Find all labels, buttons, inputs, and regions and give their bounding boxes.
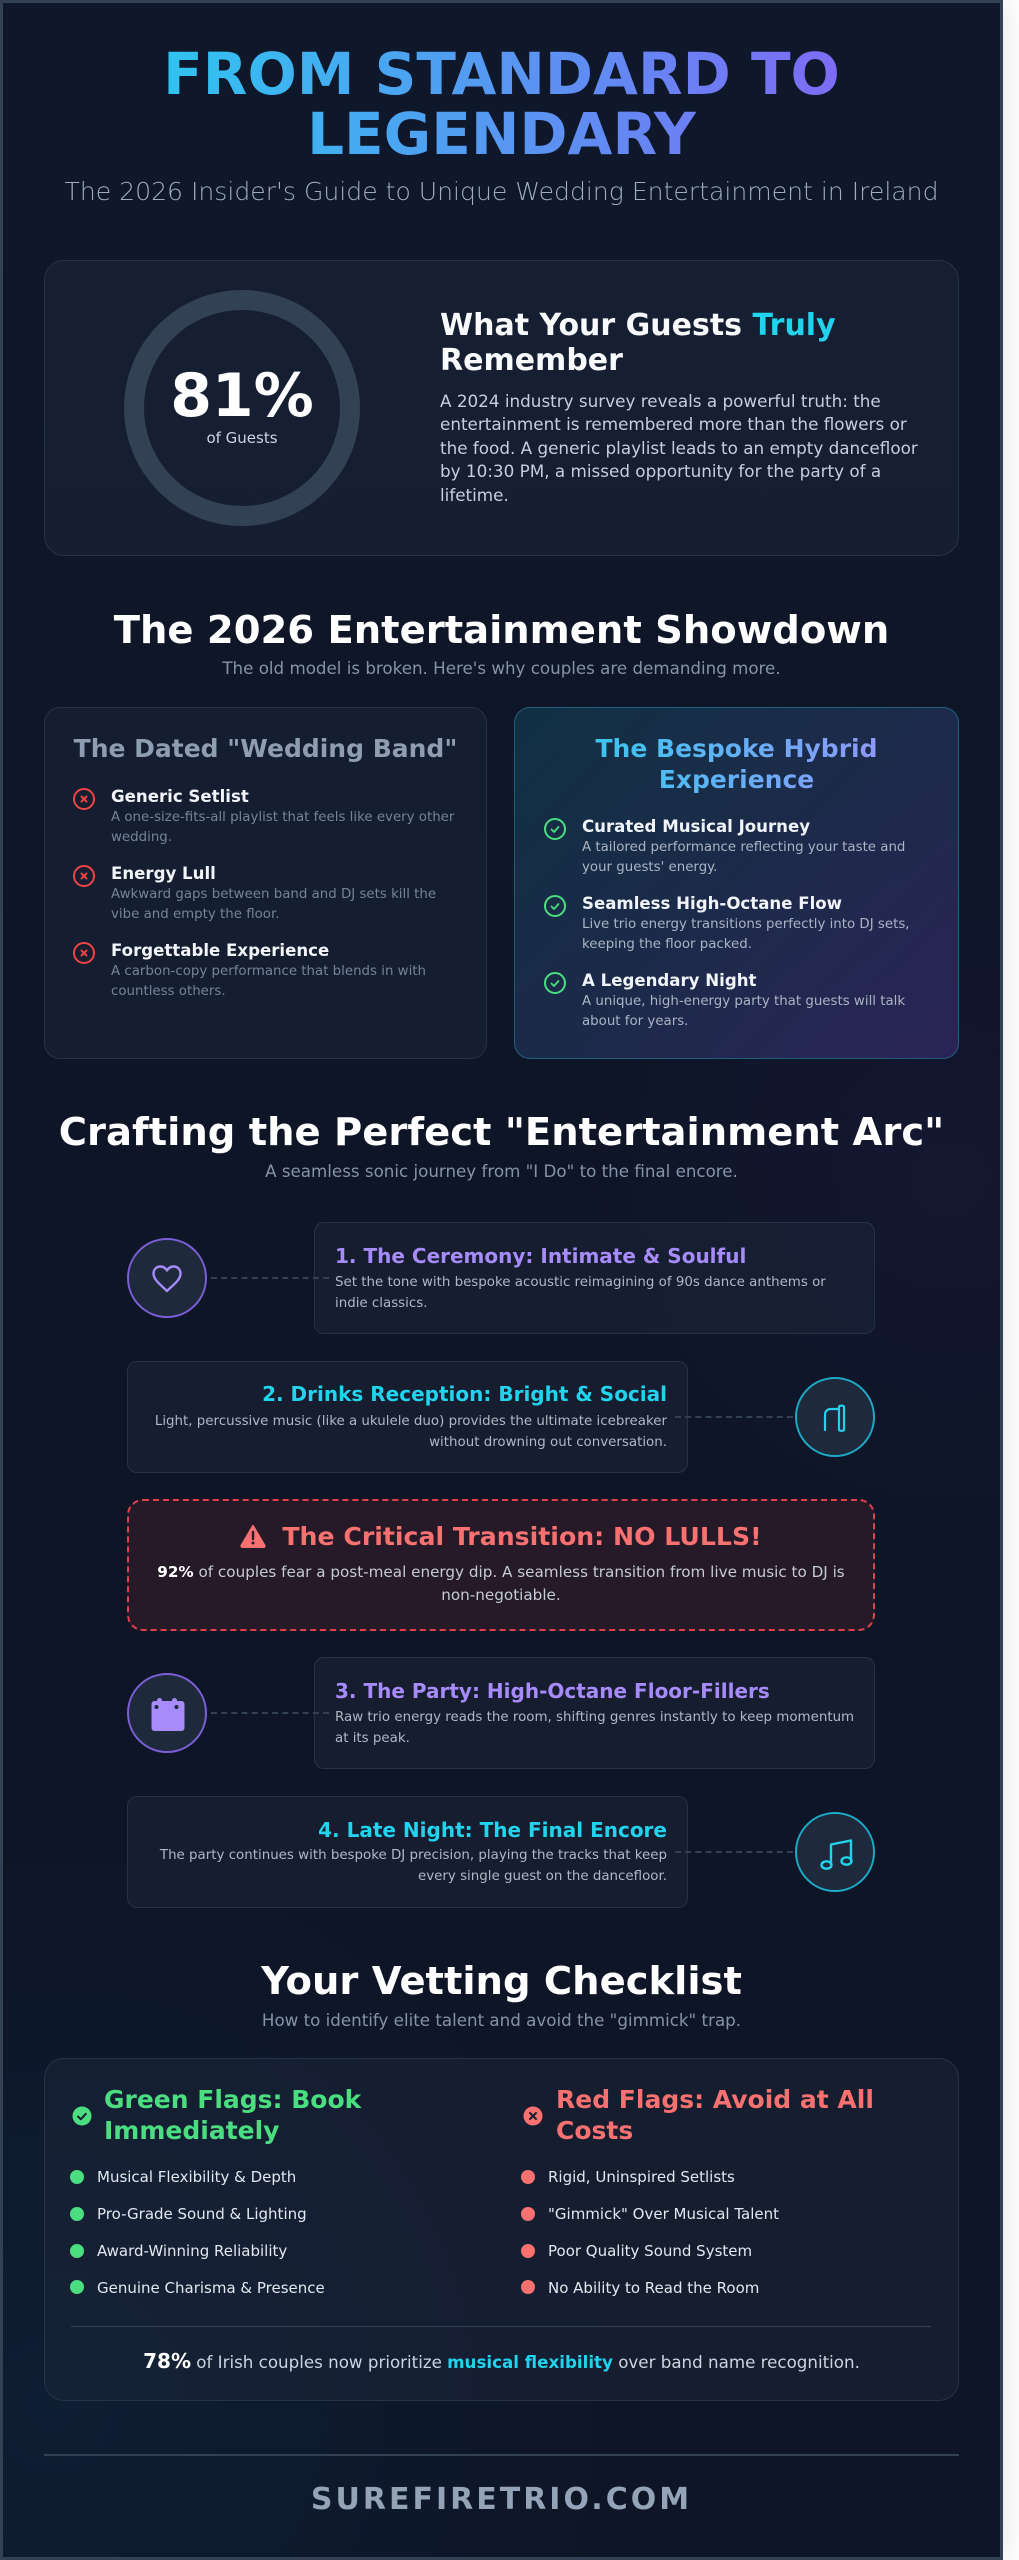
item text — [111, 787, 454, 845]
title — [44, 44, 959, 164]
step text: Light, percussive music (like a ukulele duo) provides the ultimate icebreaker — [155, 1414, 667, 1429]
stat line: 78% of Irish couples now prioritize musical flexibility over band name recognition. — [143, 2349, 860, 2373]
body text: entertainment is remembered more than the flowers or — [440, 414, 907, 434]
item text: A Legendary Night — [582, 971, 756, 990]
icon: check — [544, 972, 566, 994]
flag list — [521, 2168, 779, 2297]
panel: dated wedding band — [44, 707, 487, 1059]
item text — [582, 817, 905, 875]
step text: Set the tone with bespoke acoustic reimagining of 90s dance anthems or — [335, 1275, 826, 1290]
icon: red cross — [524, 2106, 542, 2126]
step text — [335, 1710, 854, 1746]
flag list: Award-Winning Reliability — [97, 2242, 287, 2260]
panel heading: The Bespoke Hybrid — [596, 734, 878, 763]
column: green flags — [70, 2085, 362, 2297]
subheading: entertainment arc: A seamless sonic journey from "I Do" to the final encore. — [265, 1161, 738, 1181]
title: FROM STANDARD TO — [163, 40, 840, 108]
step 4 card — [127, 1796, 688, 1908]
icon: cross — [73, 865, 95, 887]
panel heading: Experience — [659, 765, 814, 794]
panel: checklist — [44, 2058, 959, 2401]
step text: without drowning out conversation. — [429, 1434, 667, 1450]
icon: check — [544, 895, 566, 917]
column: red flags — [521, 2085, 874, 2297]
step title: 4. Late Night: The Final Encore — [318, 1818, 667, 1842]
column heading — [104, 2085, 362, 2145]
item text: countless others. — [111, 984, 226, 999]
body text: by 10:30 PM, a missed opportunity for the party of a — [440, 461, 881, 481]
step text: The party continues with bespoke DJ precision, playing the tracks that keep — [160, 1848, 667, 1863]
step 1 connector — [211, 1277, 329, 1279]
icon: heart — [127, 1238, 207, 1318]
item text — [111, 941, 426, 999]
item text: keeping the floor packed. — [582, 937, 752, 952]
column heading: Immediately — [104, 2116, 279, 2145]
step 4 connector — [675, 1851, 793, 1853]
item text: Awkward gaps between band and DJ sets kill the — [111, 887, 436, 902]
callout text: non-negotiable. — [441, 1586, 561, 1604]
body text: lifetime. — [440, 485, 509, 505]
flag list: Genuine Charisma & Presence — [97, 2279, 325, 2297]
flag list: Musical Flexibility & Depth — [97, 2168, 296, 2186]
title: LEGENDARY — [307, 100, 696, 168]
item text: A carbon-copy performance that blends in with — [111, 964, 426, 979]
item text: Curated Musical Journey — [582, 817, 810, 836]
heading: vetting checklist: Your Vetting Checklist — [261, 1959, 742, 2004]
flag list: "Gimmick" Over Musical Talent — [548, 2205, 779, 2223]
step 3 card — [314, 1657, 875, 1769]
item text: A tailored performance reflecting your taste and — [582, 840, 905, 855]
heading: showdown: The 2026 Entertainment Showdown — [114, 608, 889, 653]
stat label: of Guests — [206, 429, 278, 447]
body text: the food. A generic playlist leads to an empty dancefloor — [440, 438, 918, 458]
icon: green check — [72, 2106, 92, 2126]
step 1 card — [314, 1222, 875, 1334]
icon: music stems — [795, 1377, 875, 1457]
step text — [155, 1414, 667, 1450]
flag list: Rigid, Uninspired Setlists — [548, 2168, 735, 2186]
step 3 connector — [211, 1712, 329, 1714]
heading: what guests remember — [440, 308, 836, 378]
item: forgettable experience — [73, 941, 426, 999]
flag list: Poor Quality Sound System — [548, 2242, 752, 2260]
callout text: 92% of couples fear a post-meal energy dip. A seamless transition from live music to DJ is — [157, 1563, 845, 1581]
icon: music note — [795, 1812, 875, 1892]
item text: your guests' energy. — [582, 860, 717, 875]
item text: A unique, high-energy party that guests will talk — [582, 994, 905, 1009]
panel: bespoke hybrid experience — [514, 707, 959, 1059]
subheading: vetting checklist: How to identify elite talent and avoid the "gimmick" trap. — [262, 2010, 741, 2030]
callout: critical transition — [127, 1499, 875, 1631]
step title: 1. The Ceremony: Intimate & Soulful — [335, 1244, 746, 1268]
item text: A one-size-fits-all playlist that feels like every other — [111, 810, 454, 825]
item: seamless flow — [544, 894, 910, 952]
item text: Seamless High-Octane Flow — [582, 894, 842, 913]
item text: Forgettable Experience — [111, 941, 329, 960]
icon: cross — [73, 788, 95, 810]
item text: vibe and empty the floor. — [111, 907, 280, 922]
item text — [582, 894, 910, 952]
step 2 card — [127, 1361, 688, 1473]
heading: entertainment arc: Crafting the Perfect "Entertainment Arc" — [59, 1110, 944, 1155]
heading: what guests remember: Remember — [440, 342, 623, 378]
step 2 connector — [675, 1416, 793, 1418]
flag list: No Ability to Read the Room — [548, 2279, 759, 2297]
step text: every single guest on the dancefloor. — [418, 1868, 667, 1884]
subheading: showdown: The old model is broken. Here's why couples are demanding more. — [222, 658, 781, 678]
item: generic setlist — [73, 787, 454, 845]
column heading — [556, 2085, 874, 2145]
step text: indie classics. — [335, 1296, 427, 1310]
panel heading — [514, 734, 959, 795]
icon: calendar — [127, 1673, 207, 1753]
item text — [111, 864, 436, 922]
item text: Energy Lull — [111, 864, 216, 883]
column heading: Green Flags: Book — [104, 2085, 361, 2114]
item: legendary night — [544, 971, 905, 1029]
item text: wedding. — [111, 830, 172, 845]
step title: 3. The Party: High-Octane Floor-Fillers — [335, 1679, 770, 1703]
item text: Live trio energy transitions perfectly into DJ sets, — [582, 917, 910, 932]
step text: Raw trio energy reads the room, shifting genres instantly to keep momentum — [335, 1710, 854, 1725]
column heading: Red Flags: Avoid at All — [556, 2085, 874, 2114]
stat value: 81% — [170, 361, 314, 431]
body text — [440, 391, 918, 505]
callout heading: The Critical Transition: NO LULLS! — [282, 1522, 762, 1551]
panel: guest memory stat — [44, 260, 959, 556]
icon: cross — [73, 942, 95, 964]
body text: A 2024 industry survey reveals a powerful truth: the — [440, 391, 881, 411]
step text: at its peak. — [335, 1730, 410, 1746]
footer: website: SUREFIRETRIO.COM — [311, 2482, 692, 2517]
item text — [582, 971, 905, 1029]
item text: Generic Setlist — [111, 787, 249, 806]
callout text — [157, 1563, 845, 1604]
flag list — [70, 2168, 325, 2297]
item: energy lull — [73, 864, 436, 922]
heading: what guests remember: What Your Guests Truly — [440, 308, 836, 343]
column heading: Costs — [556, 2116, 633, 2145]
flag list: Pro-Grade Sound & Lighting — [97, 2205, 307, 2223]
step text — [160, 1848, 667, 1884]
panel heading: The Dated "Wedding Band" — [74, 734, 457, 763]
step title: 2. Drinks Reception: Bright & Social — [262, 1382, 667, 1406]
step text — [335, 1275, 826, 1310]
subtitle: The 2026 Insider's Guide to Unique Wedding Entertainment in Ireland — [64, 177, 939, 206]
item text: about for years. — [582, 1014, 688, 1029]
chart: 81% ring — [124, 290, 360, 526]
icon: check — [544, 818, 566, 840]
item: curated journey — [544, 817, 905, 875]
